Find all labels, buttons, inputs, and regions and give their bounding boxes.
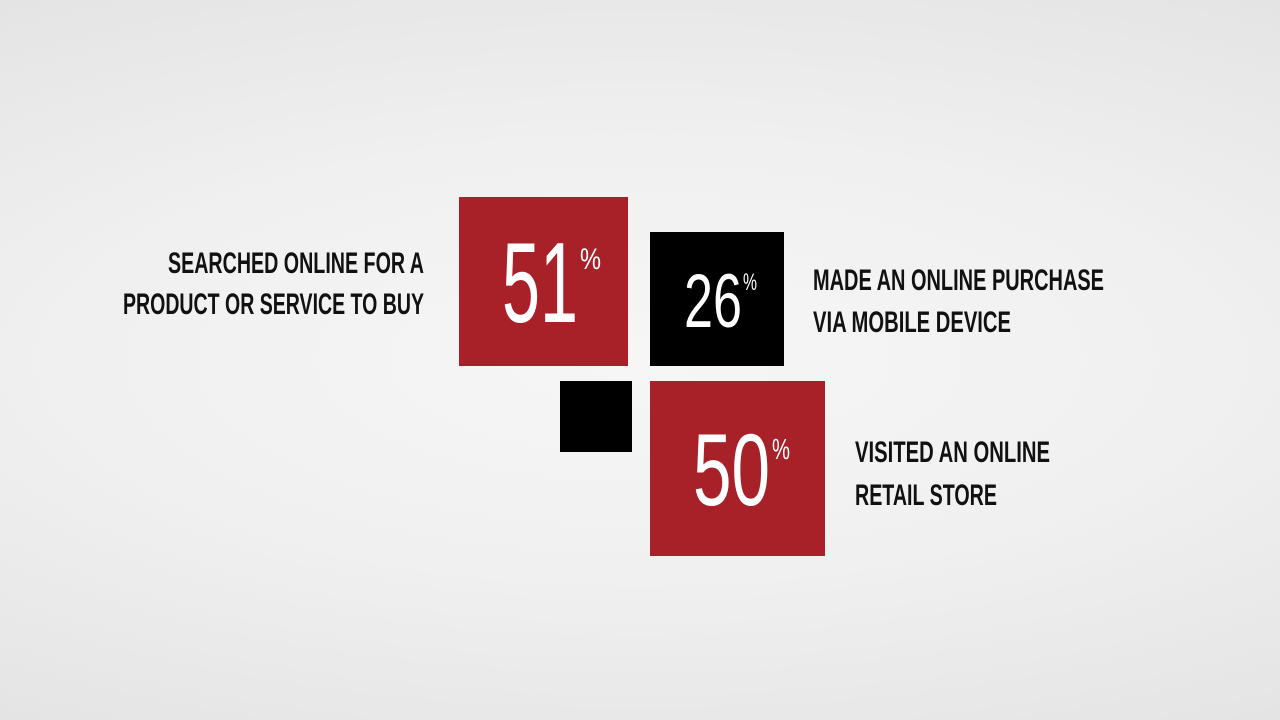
panel: 50 percent: 50 (693, 413, 770, 527)
panel: 50 percent: % (772, 434, 790, 466)
panel: 50 percent (650, 381, 825, 556)
panel: 51 percent: % (580, 243, 601, 276)
label: mobile purchase: VIA MOBILE DEVICE (813, 306, 1011, 339)
panel: 26 percent: % (743, 269, 757, 296)
label: mobile purchase (813, 264, 1104, 339)
label: searched online (123, 247, 424, 321)
label: searched online: PRODUCT OR SERVICE TO BUY (123, 288, 424, 321)
panel: 51 percent (459, 197, 628, 366)
panel: 51 percent: 51 (502, 220, 578, 347)
panel: 26 percent (650, 232, 784, 366)
label: retail store (855, 436, 1050, 512)
label: searched online: SEARCHED ONLINE FOR A (168, 247, 424, 280)
label: retail store: VISITED AN ONLINE (855, 436, 1050, 469)
decorative black square (560, 381, 632, 452)
label: mobile purchase: MADE AN ONLINE PURCHASE (813, 264, 1104, 297)
panel: 26 percent: 26 (684, 259, 742, 344)
label: retail store: RETAIL STORE (855, 479, 997, 512)
